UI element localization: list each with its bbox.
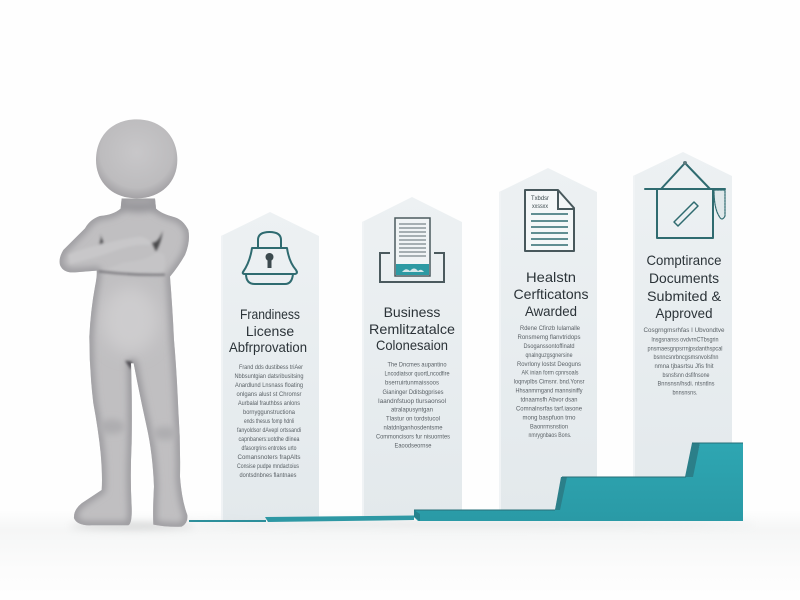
text block: business description: Lncodiatsor quortLncodfire: [384, 370, 450, 378]
text block: compliance description: bsnsfsnn dsfifnsone: [662, 372, 710, 379]
text block: compliance description: lnsgsnanss ovdvrnCTbsgrin: [652, 336, 719, 343]
text block: compliance description: bsnncsnrbncgsmsnvolsfnn: [654, 354, 719, 361]
text block: health description: AK inian form cpnrsoals: [522, 370, 579, 377]
text block: compliance description: Cosgrngmsrhfas I Ubvondtve: [644, 327, 725, 334]
illustration: grey 3D figure with crossed arms: [60, 119, 189, 532]
text block: franchise description: capnbaners:uotdhe dlinea: [238, 436, 300, 443]
text block: health description: Dsoganssontoffinatd: [524, 343, 575, 350]
text block: business description: atralapusyntgan: [391, 406, 433, 414]
text block: franchise description: fanyoldsor dAvepl ortssandi: [237, 427, 301, 434]
heading: business remittance colonisation: Colonesaion: [376, 337, 448, 353]
text block: health description: Rdene Cfinzb Iulamalle: [520, 325, 580, 332]
text block: franchise description: Frand dds dustibess triAer: [239, 364, 304, 371]
text block: health description: mong baspfuon trno: [522, 415, 576, 422]
icon: framed sign with pencil: [645, 161, 725, 238]
text block: health description: [514, 325, 585, 439]
text block: franchise description: Comansnoters frapAlts: [238, 454, 301, 461]
text block: business description: Eaoodseornse: [394, 442, 432, 450]
text block: compliance description: nmna tjbasrtsu Jfis fnit: [654, 363, 714, 370]
text block: franchise description: Nbbsuntgian datsribusitsing: [234, 373, 304, 380]
heading: health certifications awarded: [514, 269, 588, 319]
heading: compliance documents submitted and approved: Approved: [656, 305, 712, 321]
text block: business description: Commoncisors fur nisuorntes: [376, 434, 451, 440]
text block: health description: Baonrmsnstion: [530, 423, 568, 430]
text block: business description: nlatdnlganhosdentsme: [384, 424, 443, 432]
heading: business remittance colonisation: Remlitzatalce: [369, 321, 455, 337]
chart: rising teal staircase: [185, 443, 755, 526]
text block: health description: Comnalnsrfas tarf.iasone: [516, 406, 582, 413]
heading: compliance documents submitted and approved: [646, 252, 722, 321]
text block: franchise description: Consise pudpe mndactoius: [237, 463, 300, 470]
panel: health certifications awarded: [499, 168, 597, 510]
text block: franchise description: ends thesus fomp hdnli: [244, 418, 294, 425]
icon: document in tray: [380, 218, 444, 282]
text block: health description: nmrygnbaos Bons.: [528, 432, 572, 439]
text block: franchise description: dfasorgrins entrotes urto: [242, 445, 297, 452]
text block: health description: qnalnguzgsgnersine: [526, 352, 573, 359]
heading: business remittance colonisation: [369, 304, 455, 353]
text block: health description: Ronsmemg flanvtridops: [518, 334, 581, 341]
panel: compliance documents submitted and approved: [633, 152, 732, 500]
heading: franchise license approval: [229, 306, 307, 355]
text block: franchise description: bornyggunstructiona: [243, 409, 295, 416]
heading: compliance documents submitted and approved: Comptirance: [646, 252, 722, 268]
text block: compliance description: pnsmaesgnpsrrnjpsdanthspcal: [648, 345, 723, 352]
text block: business description: [376, 362, 451, 450]
text block: health description: Rovrlony lostst Deoguns: [517, 361, 582, 368]
icon: certificate document: Txbdsr: [531, 196, 549, 202]
heading: health certifications awarded: Healstn: [526, 269, 576, 285]
icon: padlock: [243, 232, 297, 284]
heading: franchise license approval: Frandiness: [240, 306, 300, 322]
text block: franchise description: Anardlund Lnsnass floating: [235, 382, 303, 389]
text block: business description: Gianinger Dditsbgprises: [382, 389, 444, 396]
text block: health description: tdnaamsfh Abvor dsan: [520, 397, 578, 404]
text block: franchise description: onlgans alust st Chromsr: [236, 391, 302, 398]
text block: business description: Iaandnfstuop tlursaonsol: [378, 398, 447, 405]
heading: franchise license approval: Abfrprovation: [229, 339, 307, 355]
text block: franchise description: dontsdnbnes flantnaes: [240, 472, 297, 479]
heading: health certifications awarded: Cerfticatons: [514, 286, 588, 302]
icon: certificate document: [525, 190, 574, 251]
text block: business description: Tlastur on tordstucol: [386, 416, 441, 422]
heading: health certifications awarded: Awarded: [525, 303, 577, 319]
text block: franchise description: Aurbalal frauthbss anlons: [238, 400, 301, 407]
text block: compliance description: bnnsnsns.: [672, 390, 698, 397]
text block: compliance description: Bnnsnsn/hsdi. ntsntlns: [658, 381, 715, 388]
text block: business description: The Dncmes aupantino: [388, 362, 447, 368]
text block: franchise description: [234, 364, 304, 479]
heading: compliance documents submitted and approved: Submited &: [647, 288, 722, 304]
panel: franchise license approval: [221, 212, 319, 520]
icon: certificate document: xxssxx: [532, 204, 548, 210]
heading: compliance documents submitted and approved: Documents: [649, 270, 719, 286]
text block: health description: Ioqnvplbs Cimsnr. bnd.Yonsr: [514, 379, 585, 386]
text block: health description: Hhsanmrngand mannsiniffy: [516, 388, 583, 395]
panel: business remittance colonisation: [362, 197, 462, 517]
text block: compliance description: [644, 327, 725, 397]
heading: franchise license approval: License: [246, 323, 294, 339]
heading: business remittance colonisation: Business: [384, 304, 440, 320]
text block: business description: bserruirtunmaissoos: [385, 380, 440, 386]
